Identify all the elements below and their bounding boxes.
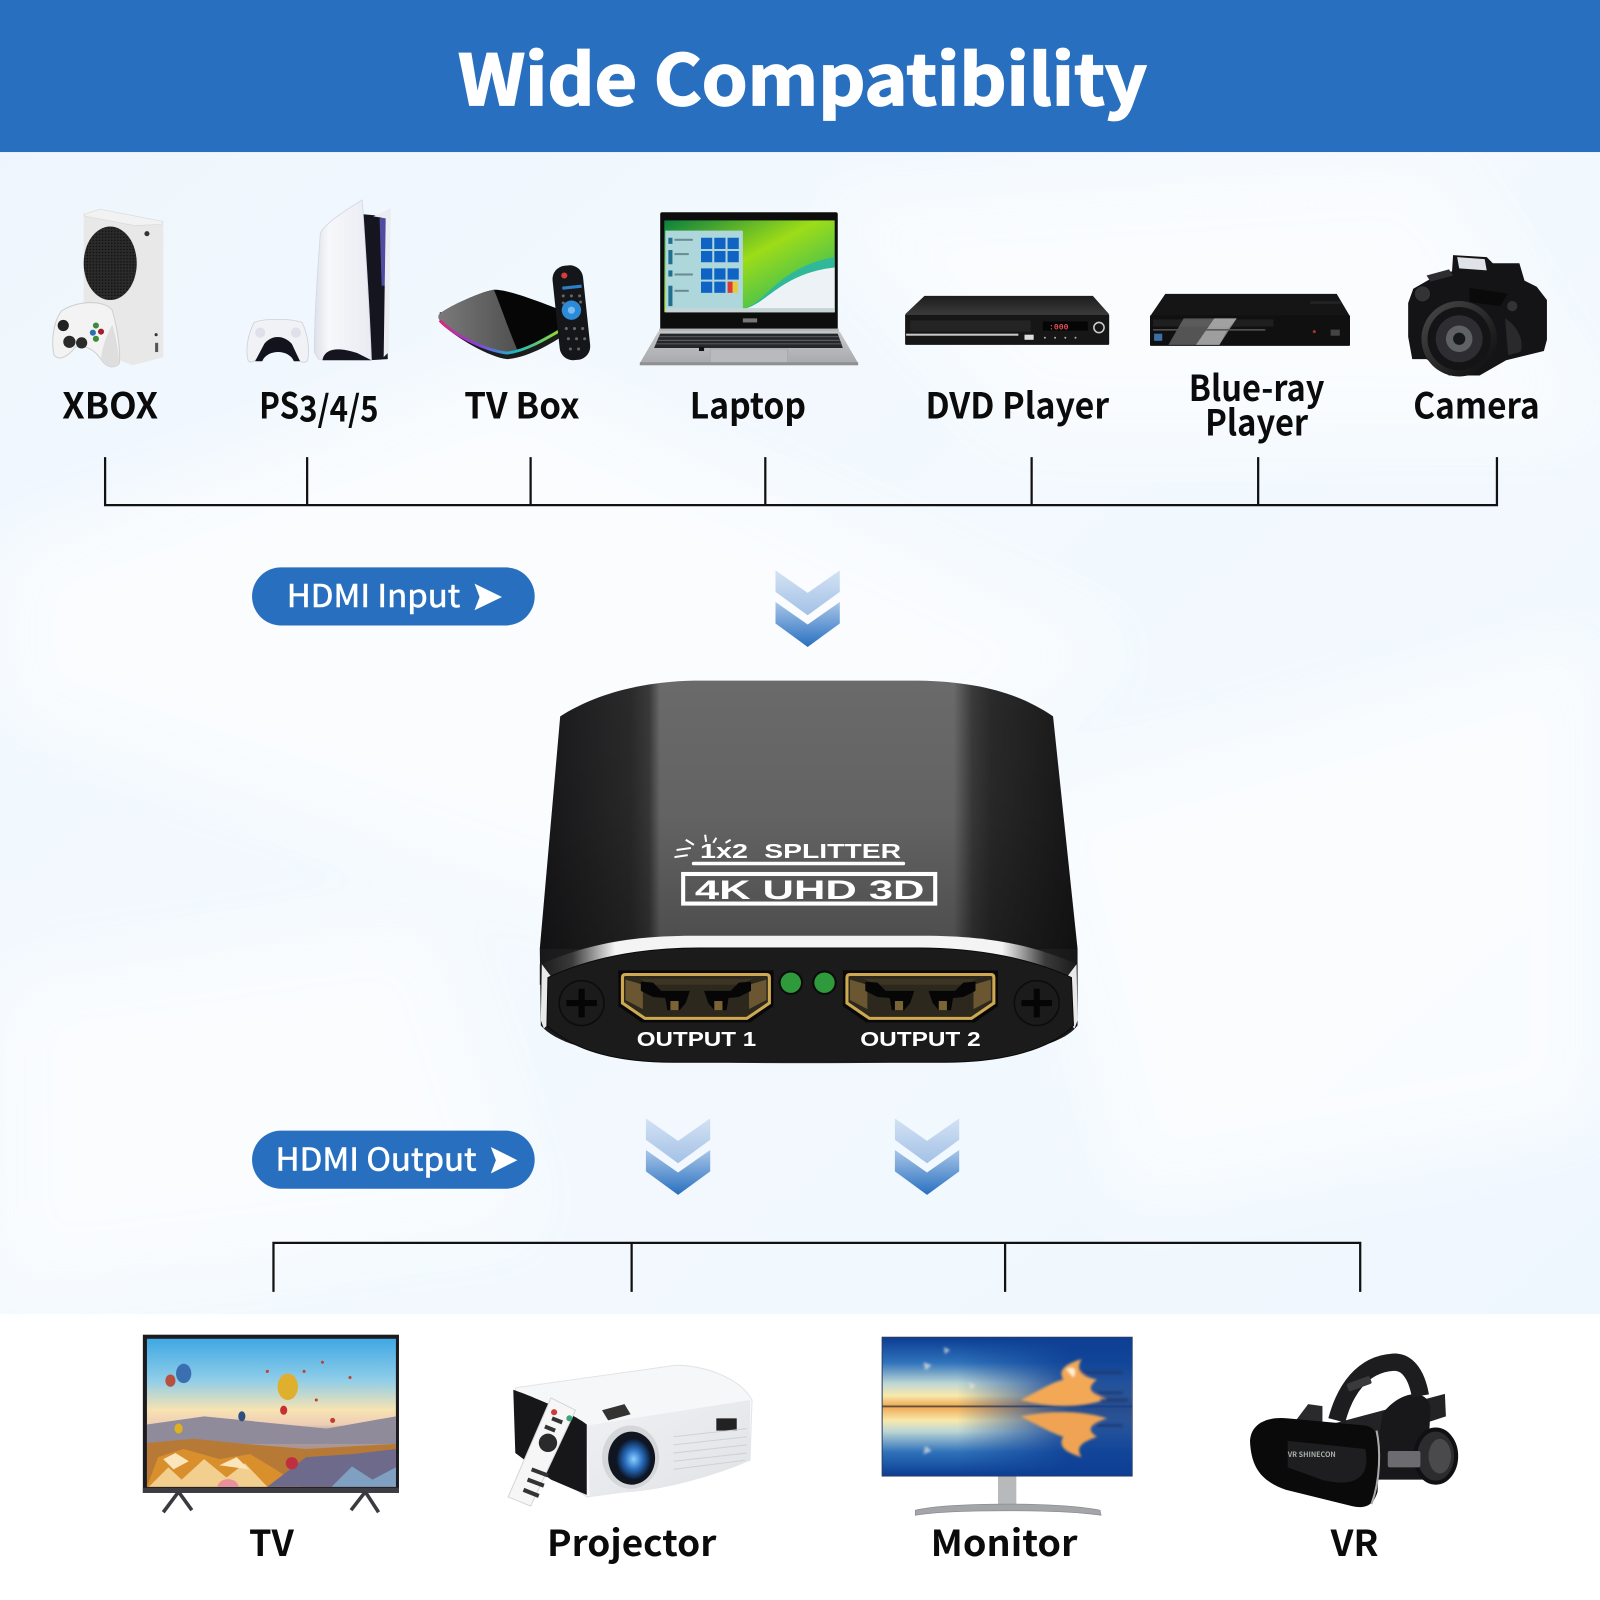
icon: DVD player: [905, 296, 1109, 345]
icon: camera: [1408, 255, 1547, 377]
title banner: [0, 0, 1600, 152]
label: TV: TV: [249, 1516, 295, 1567]
product label: 4K UHD 3D: [683, 874, 935, 905]
product label: 4K UHD 3D: 4K UHD 3D: [695, 875, 924, 905]
icon: DVD player: :000: [1049, 324, 1069, 333]
label: DVD Player: DVD Player: [926, 378, 1110, 429]
label: Blue-ray Player: Player: [1205, 396, 1309, 447]
product label: 1x2 splitter: 1x2: [700, 841, 748, 863]
label: XBOX: XBOX: [62, 378, 158, 429]
port: output 2: [843, 970, 998, 1022]
label: PS3/4/5: 3/4/5: [299, 381, 379, 432]
icon: VR headset: VR SHINECON: [1287, 1450, 1336, 1460]
bottom connector bracket: [273, 1243, 1360, 1292]
icon: VR headset: [1250, 1362, 1456, 1507]
label: Projector: Projector: [547, 1516, 717, 1567]
title: Wide Compatibility: [458, 25, 1147, 125]
port label: OUTPUT 1: OUTPUT 1: [637, 1029, 756, 1051]
icon: PlayStation console and controller: [247, 200, 391, 362]
arrow: output 2 chevrons: [895, 1118, 959, 1195]
label: PS3/4/5: PS: [259, 378, 305, 429]
badge: HDMI Output: HDMI Output: [276, 1134, 477, 1180]
badge: HDMI Input: HDMI Input: [287, 571, 460, 617]
screw: right: [1014, 981, 1059, 1026]
label: VR: VR: [1330, 1516, 1379, 1567]
label: Monitor: Monitor: [931, 1516, 1078, 1567]
badge: HDMI Output: [252, 1131, 535, 1189]
icon: TV box with remote: [438, 264, 592, 362]
label: Laptop: Laptop: [690, 378, 806, 429]
icon: Xbox console and controller: [53, 209, 163, 367]
label: Blue-ray Player: [1189, 361, 1325, 447]
product: HDMI splitter: [540, 681, 1078, 1063]
screw: left: [559, 981, 604, 1026]
label: Camera: Camera: [1413, 378, 1540, 429]
arrow: input chevrons: [776, 570, 840, 647]
top connector bracket: [105, 457, 1497, 505]
badge: HDMI Input: [252, 567, 535, 626]
arrow: output 1 chevrons: [646, 1118, 710, 1195]
icon: Blu-ray player: [1150, 294, 1350, 346]
port: output 1: [618, 970, 773, 1022]
icon: monitor: [882, 1337, 1133, 1515]
product label: 1x2 splitter: SPLITTER: [764, 841, 901, 863]
port label: OUTPUT 2: OUTPUT 2: [860, 1029, 981, 1051]
label: Blue-ray Player: Blue-ray: [1189, 361, 1325, 412]
product label: 1x2 splitter: [674, 835, 905, 865]
icon: laptop: [640, 212, 858, 365]
icon: projector: [508, 1365, 752, 1506]
icon: TV: [143, 1335, 399, 1512]
label: TV Box: TV Box: [464, 378, 580, 429]
LED indicators: [779, 970, 837, 995]
